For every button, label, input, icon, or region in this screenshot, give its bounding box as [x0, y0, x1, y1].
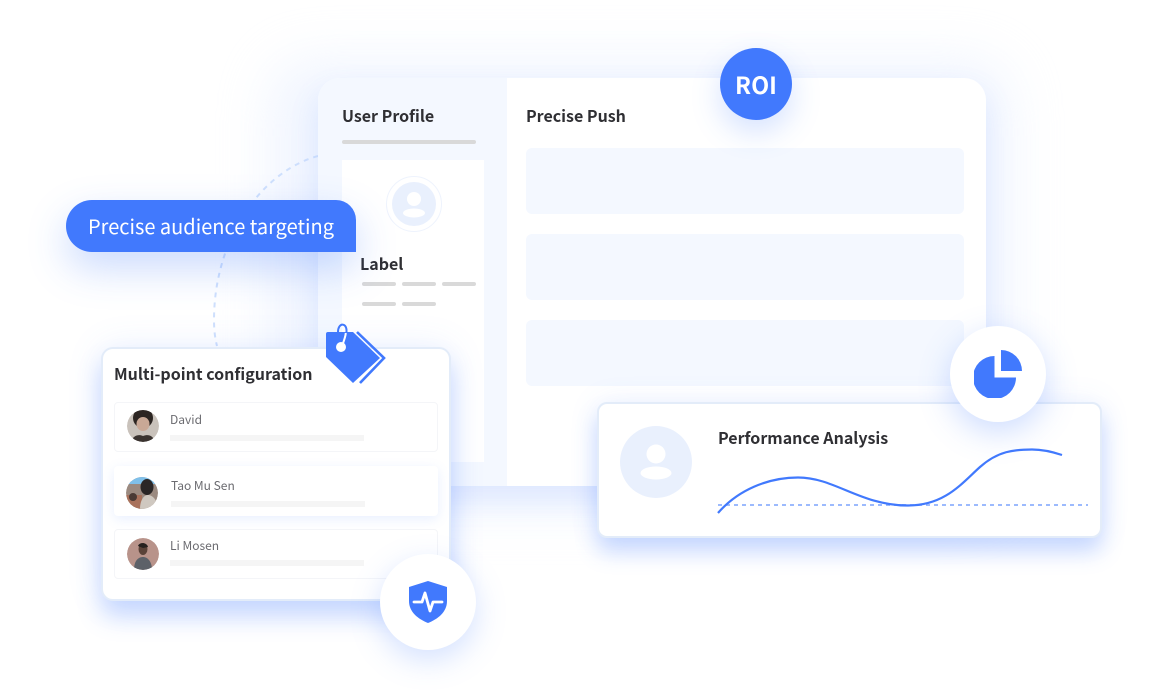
- icon: price tag: [326, 324, 386, 384]
- name: Li Mosen: [170, 537, 219, 554]
- avatar Li Mosen: [127, 538, 159, 570]
- row: Li Mosen: [114, 529, 438, 579]
- pie glyph: [974, 350, 1022, 398]
- heading: precise push: Precise Push: [526, 103, 626, 127]
- main dashboard panel: [318, 78, 986, 486]
- row: David: [114, 402, 438, 452]
- label bars: [362, 282, 476, 306]
- profile card: [342, 160, 484, 462]
- avatar Tao Mu Sen: [126, 477, 158, 509]
- label heading: Label: [360, 251, 403, 275]
- heading: Multi-point configuration: [114, 361, 312, 385]
- push row 1: [526, 148, 964, 214]
- placeholder line: [170, 435, 364, 441]
- avatar David: [127, 410, 159, 442]
- placeholder line: [170, 560, 364, 566]
- shield glyph: [409, 581, 447, 623]
- avatar ring: [386, 176, 442, 232]
- ROI badge: [720, 48, 792, 120]
- name: David: [170, 411, 202, 428]
- name: Tao Mu Sen: [171, 477, 235, 494]
- avatar icon: [392, 182, 436, 226]
- panel: performance analysis: [597, 402, 1102, 538]
- soft glow behind the main panel: [270, 60, 1010, 510]
- panel: multi-point configuration: [101, 347, 451, 601]
- pill: precise audience targeting: [66, 200, 356, 252]
- ROI badge: ROI: [735, 67, 777, 101]
- placeholder line: [171, 501, 365, 507]
- pill: precise audience targeting: Precise audience targeting: [88, 211, 334, 240]
- heading: user profile: User Profile: [342, 103, 434, 127]
- push row 3: [526, 320, 964, 386]
- avatar icon: [620, 426, 692, 498]
- push row 2: [526, 234, 964, 300]
- icon: pie chart badge: [950, 326, 1046, 422]
- profile underline: [342, 140, 476, 144]
- row: Tao Mu Sen: [114, 466, 438, 516]
- icon: shield badge: [380, 554, 476, 650]
- sidebar background: [318, 78, 507, 486]
- heading: Performance Analysis: [718, 425, 888, 449]
